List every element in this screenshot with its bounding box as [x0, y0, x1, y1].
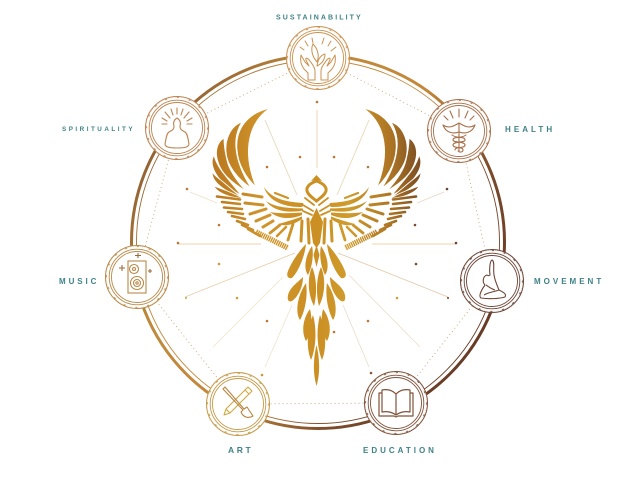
node: education [364, 372, 428, 434]
icon: speaker [119, 253, 152, 293]
label: spirituality: SPIRITUALITY [62, 126, 135, 133]
label: education: EDUCATION [363, 446, 437, 455]
dotted connecting heptagon [137, 58, 492, 404]
icon: caduceus [443, 109, 475, 152]
label: art: ART [228, 445, 253, 455]
node: art [206, 372, 270, 436]
label: sustainability: SUSTAINABILITY [276, 14, 363, 22]
outer ring [132, 56, 504, 428]
node: health [428, 100, 490, 162]
central phoenix [212, 108, 421, 386]
sun rays [178, 110, 456, 367]
icon: yoga figure [480, 260, 506, 299]
node: sustainability [286, 26, 350, 90]
node: movement [460, 250, 524, 312]
label: movement: MOVEMENT [534, 277, 604, 286]
icon: hands with sprout [300, 38, 336, 80]
icon: meditating buddha [162, 108, 192, 148]
label: music: MUSIC [59, 277, 99, 286]
node: music [106, 246, 168, 308]
right wing and half body [316, 108, 421, 386]
icon: crossed pencil and brush [223, 387, 253, 417]
label: health: HEALTH [505, 125, 555, 134]
scattered dots [177, 101, 457, 376]
left wing and half body [212, 108, 316, 386]
icon: open book [379, 390, 413, 417]
node: spirituality [146, 96, 208, 160]
